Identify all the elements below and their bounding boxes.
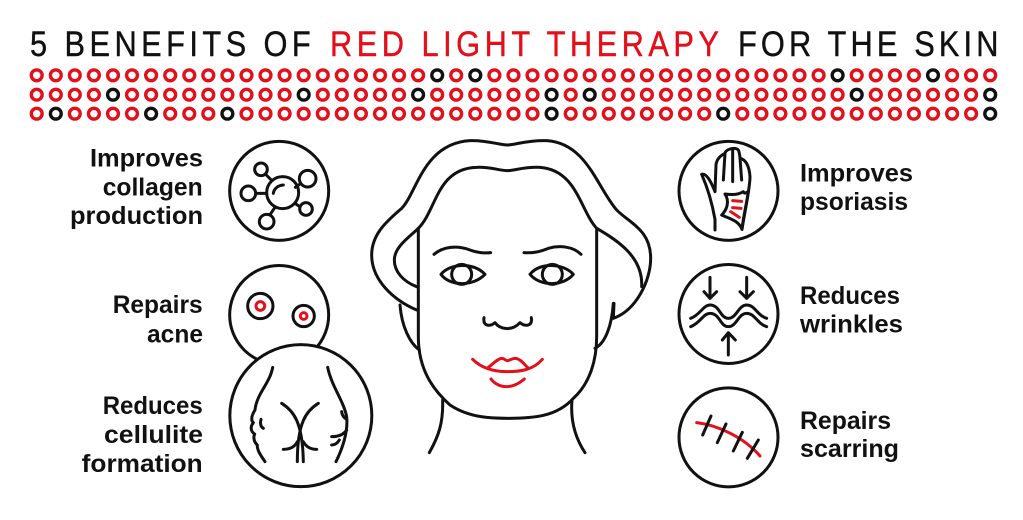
irises [452,264,562,284]
title: FOR THE SKIN [738,24,998,63]
label: improves collagen production: Improves [90,145,203,173]
ears and neck [400,303,613,453]
label: improves psoriasis [800,160,913,216]
label: repairs acne [113,291,203,349]
label: improves collagen production [70,145,203,230]
label: repairs acne: Repairs [113,291,203,319]
lips [473,358,542,387]
label: improves psoriasis: Improves [800,160,913,188]
label: reduces cellulite formation [82,392,203,478]
illustration: face [372,141,651,453]
label: reduces cellulite formation: Reduces [103,392,203,420]
label: repairs scarring: Repairs [800,407,891,435]
label: reduces wrinkles: Reduces [800,282,900,310]
icon: scar [679,388,778,487]
label: reduces wrinkles: wrinkles [799,311,903,339]
hairline [394,167,642,287]
label: reduces wrinkles [799,282,903,339]
icon: molecule [230,141,329,240]
label: improves psoriasis: psoriasis [800,188,908,216]
label: reduces cellulite formation: cellulite [104,421,203,449]
label: repairs scarring [800,407,899,463]
eyebrows [434,247,581,254]
label: repairs scarring: scarring [800,435,899,463]
face contour [418,228,597,418]
label: reduces cellulite formation: formation [82,450,203,478]
icon: acne [230,265,329,364]
eyes [441,265,573,284]
nose [484,318,531,329]
label: improves collagen production: production [70,202,203,230]
hair outline [372,141,651,318]
title [30,24,998,63]
icon: wrinkles [679,264,778,363]
label: repairs acne: acne [147,321,203,349]
title: RED LIGHT THERAPY [330,24,719,63]
icon: cellulite [230,345,372,487]
title: 5 BENEFITS OF [30,24,311,63]
icon: hand with psoriasis [679,141,778,240]
dot pattern band [31,70,996,119]
label: improves collagen production: collagen [103,174,203,202]
